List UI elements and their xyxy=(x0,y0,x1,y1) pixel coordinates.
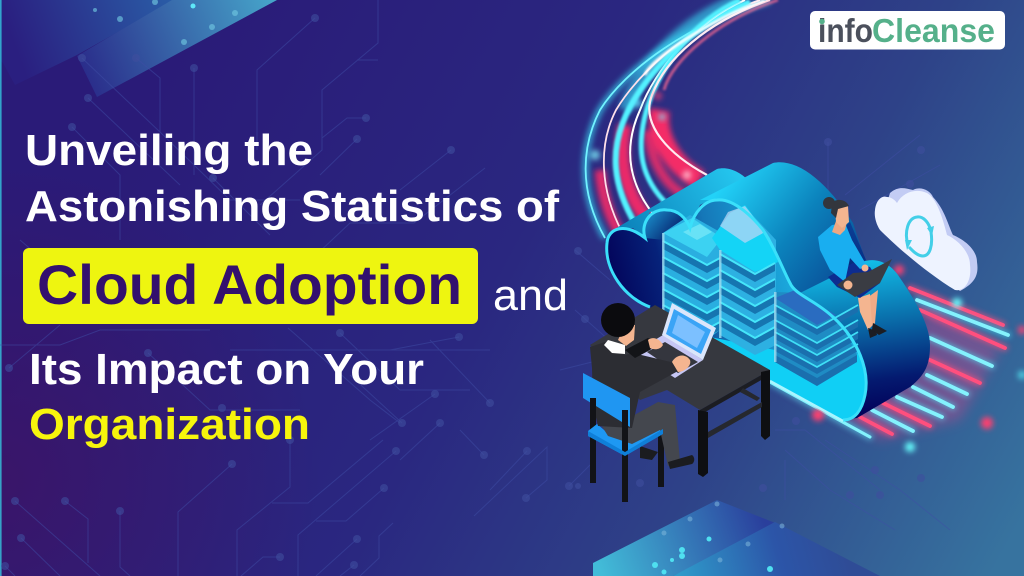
cloud floor xyxy=(700,335,867,420)
bottom diagonal data bands xyxy=(593,500,880,576)
lower rim xyxy=(770,381,843,421)
heading line 2: Astonishing Statistics of xyxy=(25,182,559,231)
desk xyxy=(590,305,770,477)
dark panel behind woman xyxy=(800,222,866,295)
cloud inner wall xyxy=(607,200,866,420)
cloud front rim xyxy=(607,200,866,420)
laptop on desk xyxy=(635,303,716,378)
heading line 5: Organization: Organization xyxy=(29,400,310,449)
rack 1 xyxy=(662,215,722,345)
rack 3 xyxy=(774,290,858,386)
man seated xyxy=(590,303,694,469)
rack 2 xyxy=(712,205,778,355)
logo badge xyxy=(810,11,1005,50)
logo badge: info xyxy=(818,12,873,49)
top-left diagonal bands xyxy=(0,0,277,576)
light streams behind cloud xyxy=(586,0,778,238)
server racks xyxy=(607,200,866,421)
blue chair back legs xyxy=(588,400,664,487)
woman seated with laptop xyxy=(818,197,892,338)
word: and: and xyxy=(493,271,568,320)
cloud upper side surface xyxy=(700,162,866,296)
highlighted phrase: Cloud Adoption: Cloud Adoption xyxy=(37,253,462,316)
light rays under cloud xyxy=(770,265,1024,452)
small white sync cloud xyxy=(875,188,977,291)
heading line 4: Its Impact on Your xyxy=(29,345,424,394)
heading line 1: Unveiling the xyxy=(25,126,313,175)
cloud inner arch xyxy=(644,210,690,240)
isometric cloud with servers xyxy=(607,162,930,421)
cloud lower right side surface xyxy=(800,260,930,420)
cloud left lobe top surface xyxy=(613,168,748,238)
logo badge: Cleanse xyxy=(872,12,995,49)
chair front xyxy=(583,373,663,502)
